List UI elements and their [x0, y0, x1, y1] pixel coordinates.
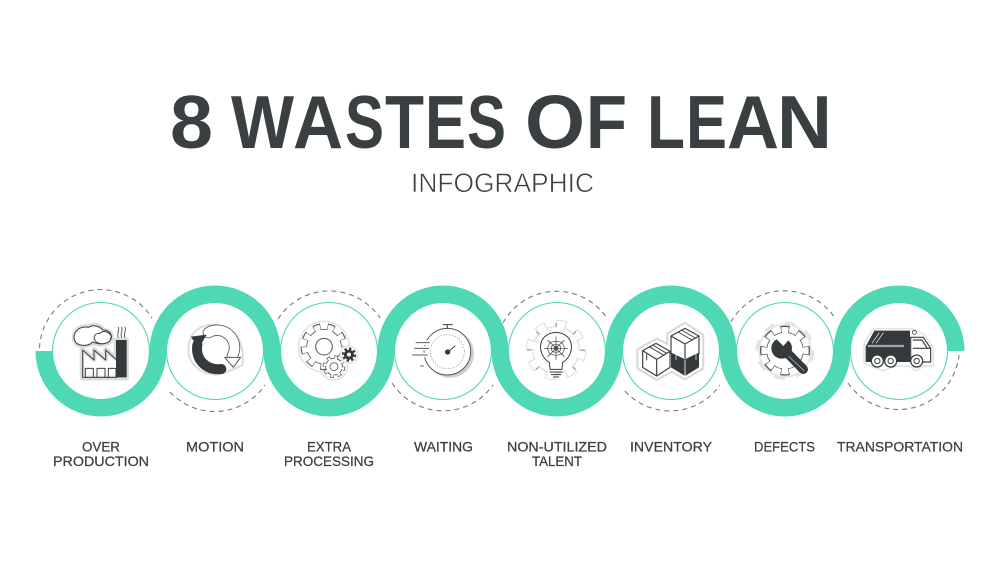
title: T — [385, 80, 424, 164]
icon: gears — [299, 321, 358, 380]
title: W — [231, 80, 294, 164]
title: A — [727, 80, 779, 164]
label: inventory: INVENTORY — [630, 438, 713, 454]
label: extra processing — [284, 438, 374, 469]
label: motion: MOTION — [186, 438, 244, 454]
label: defects: DEFECTS — [754, 438, 815, 454]
label: non-utilized talent: TALENT — [532, 453, 582, 469]
title: A — [293, 80, 343, 164]
panel: transportation — [837, 302, 963, 454]
label: extra processing: PROCESSING — [284, 453, 374, 469]
label: non-utilized talent: NON-UTILIZED — [507, 438, 607, 454]
panel: extra processing — [278, 291, 380, 469]
subtitle: INFOGRAPHIC — [411, 168, 594, 198]
label: over production — [53, 438, 149, 469]
label: over production: OVER — [82, 438, 120, 454]
wave ribbon — [44, 294, 956, 408]
icon: gear with wrench — [757, 323, 813, 379]
title: L — [647, 80, 685, 164]
label: waiting: WAITING — [414, 438, 473, 454]
title: F — [586, 80, 627, 164]
title: S — [467, 80, 506, 164]
panel: waiting — [392, 302, 493, 454]
icon: factory — [74, 325, 127, 378]
icon: circular arrows — [188, 325, 243, 375]
title: E — [425, 80, 466, 164]
panel: motion — [166, 302, 265, 454]
title: E — [686, 80, 727, 164]
icon: light bulb with cobweb — [527, 323, 585, 377]
title: O — [525, 80, 585, 164]
icon: truck — [864, 329, 933, 371]
label: non-utilized talent — [507, 438, 607, 469]
title: 8 — [170, 80, 213, 164]
panel: non-utilized talent — [503, 291, 607, 469]
title: N — [777, 80, 832, 164]
panel: inventory — [622, 302, 720, 454]
title: S — [345, 80, 384, 164]
icon: stacked boxes — [637, 323, 703, 380]
label: over production: PRODUCTION — [53, 453, 149, 469]
panel: defects — [731, 291, 835, 454]
label: transportation: TRANSPORTATION — [837, 438, 963, 454]
icon: stopwatch — [412, 325, 474, 378]
panel: over production — [40, 290, 152, 469]
label: extra processing: EXTRA — [307, 438, 352, 454]
